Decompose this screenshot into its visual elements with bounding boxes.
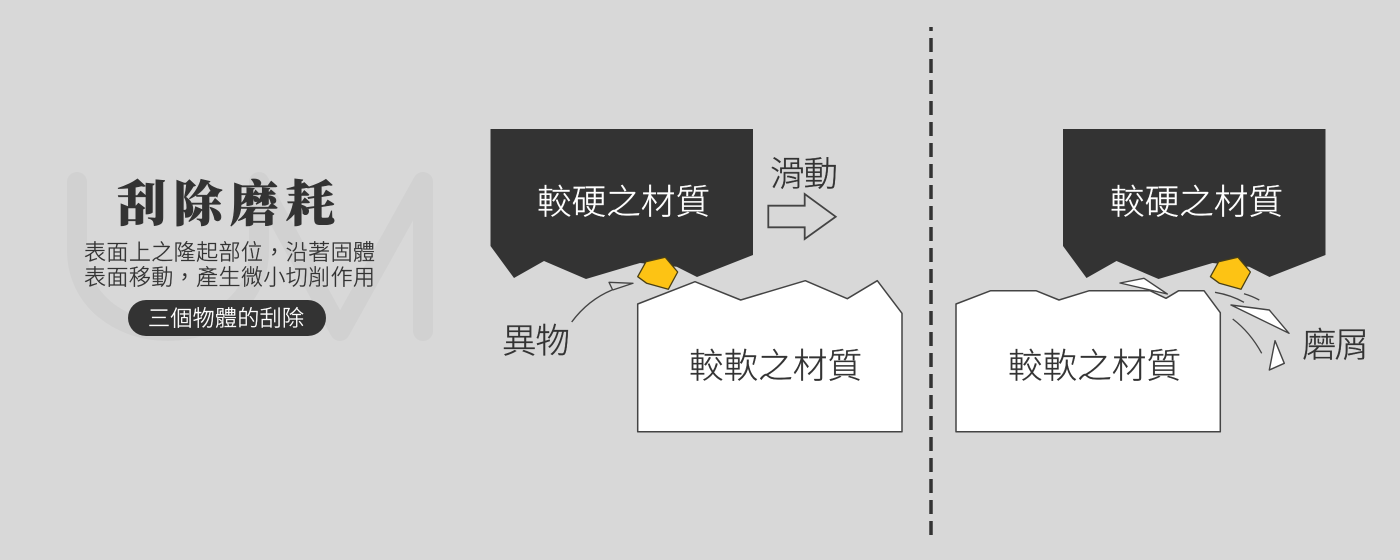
softer material block, worn <box>956 291 1220 432</box>
left diagram: before abrasion <box>490 129 902 432</box>
harder material block <box>1063 129 1326 279</box>
sliding arrow <box>768 194 836 239</box>
tag: three-body abrasion: 三個物體的刮除 <box>148 306 304 331</box>
debris motion lines <box>1215 292 1262 353</box>
label: softer material: 較軟之材質 <box>1008 348 1181 386</box>
label: harder material: 較硬之材質 <box>1110 184 1283 222</box>
centre dashed divider <box>929 27 933 535</box>
foreign matter label: 異物 <box>502 323 570 361</box>
foreign particle <box>1210 257 1250 289</box>
wear debris label: 磨屑 <box>1302 327 1369 365</box>
wear debris chips <box>1120 278 1289 370</box>
sliding label: 滑動 <box>770 156 838 194</box>
description text <box>84 240 375 290</box>
leader arrow to particle <box>572 282 633 322</box>
label: harder material: 較硬之材質 <box>537 184 710 222</box>
description text: 表面上之隆起部位，沿著固體 <box>84 240 375 265</box>
description text: 表面移動，產生微小切削作用 <box>84 265 375 290</box>
label: softer material: 較軟之材質 <box>689 348 862 386</box>
right diagram: after abrasion <box>956 129 1369 432</box>
harder material block <box>490 129 753 279</box>
title: 刮除磨耗 <box>117 177 335 232</box>
foreign particle <box>638 257 678 289</box>
softer material block <box>638 281 902 432</box>
tag: three-body abrasion <box>128 300 326 336</box>
watermark: UM logo <box>77 182 423 331</box>
